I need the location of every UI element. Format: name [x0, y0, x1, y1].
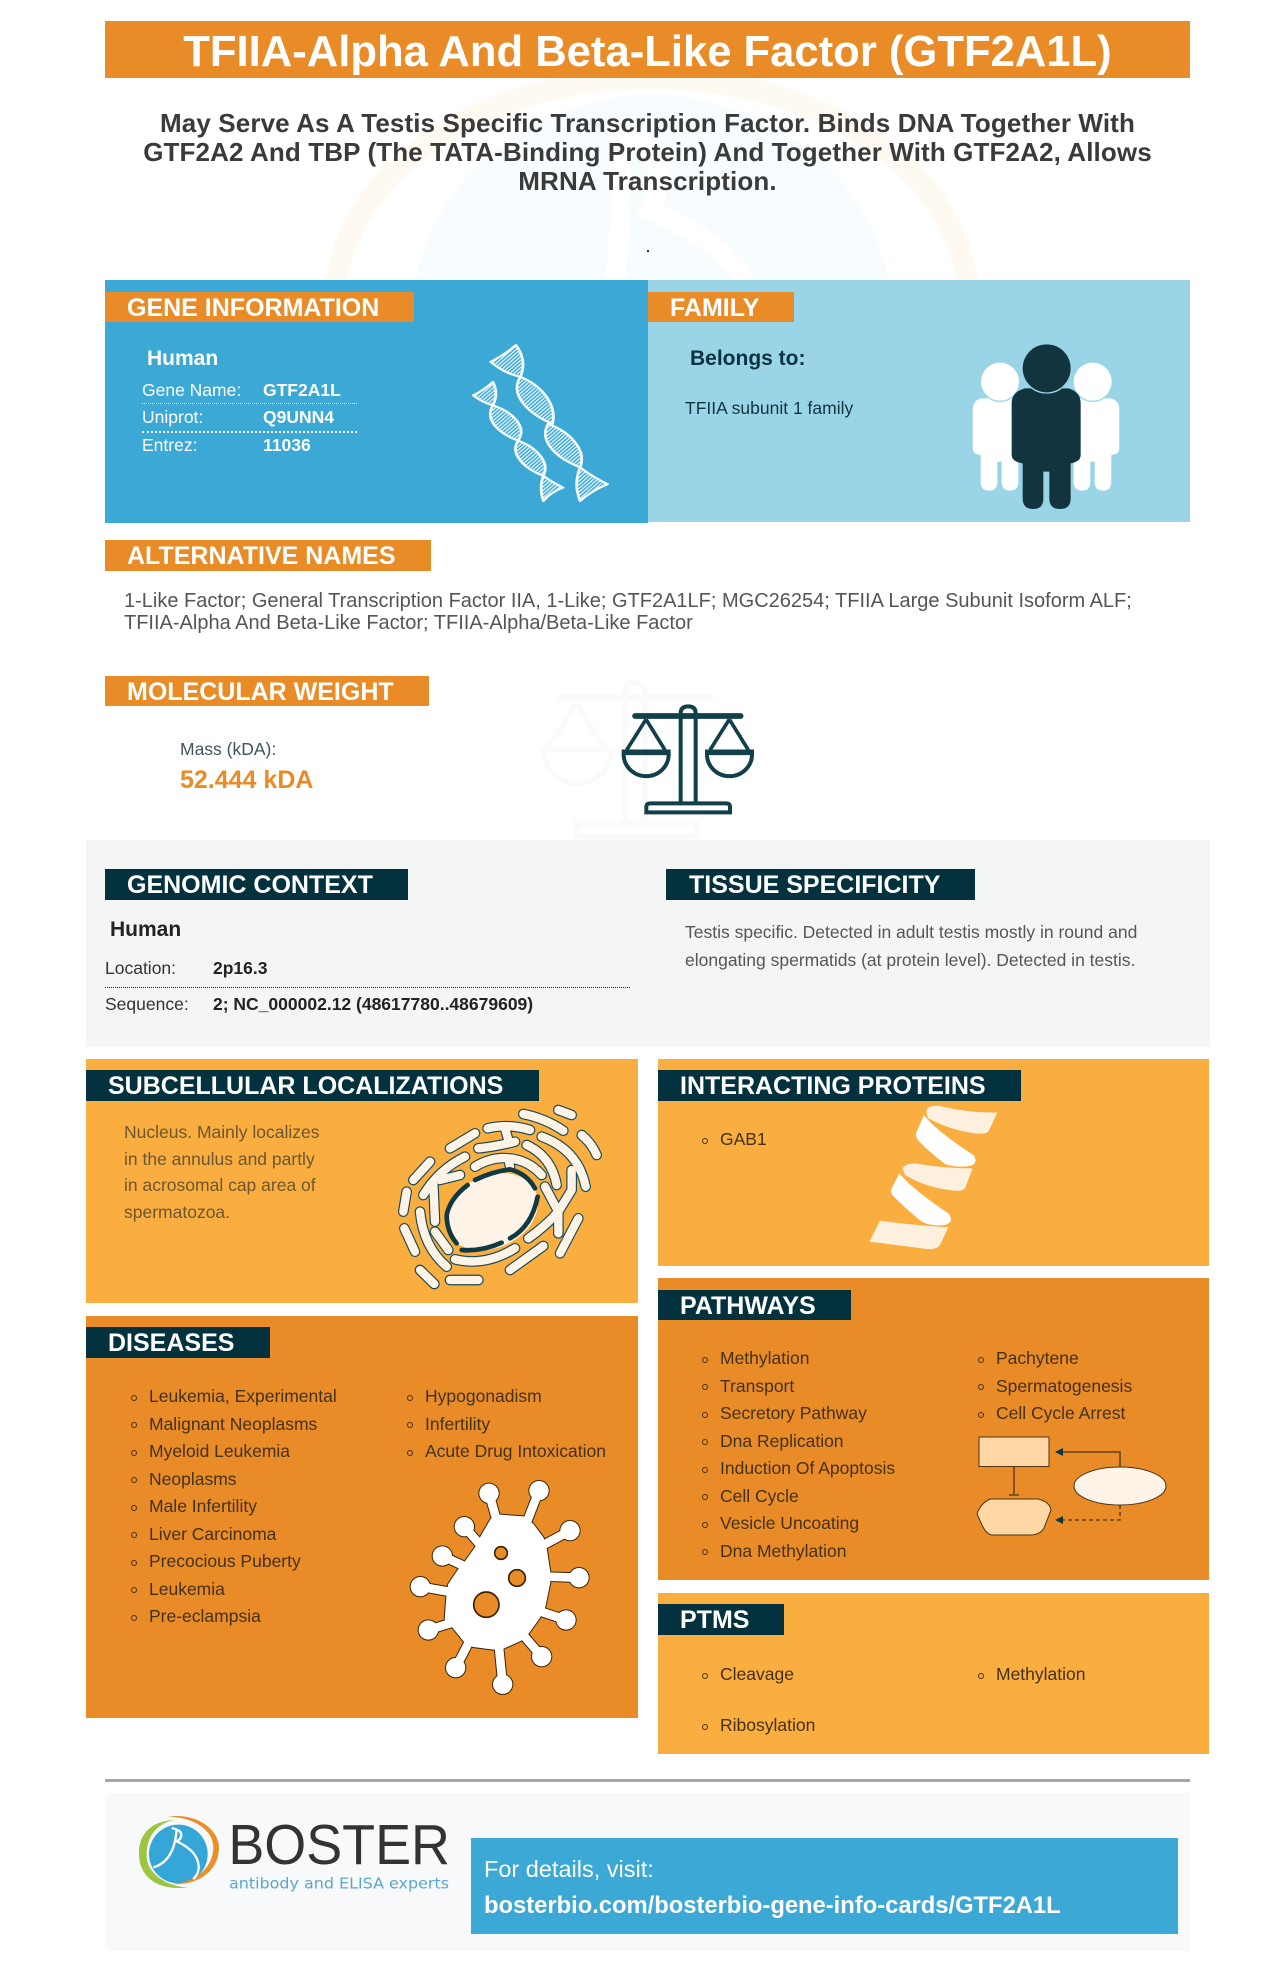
diseases list column 1: Male Infertility [149, 1496, 257, 1516]
callout: details link [471, 1838, 1178, 1934]
gene name row: Gene Name: [142, 380, 241, 400]
panel: diseases [86, 1316, 638, 1718]
gene name row: GTF2A1L [263, 380, 341, 400]
heading: gene information: GENE INFORMATION [127, 294, 379, 322]
summary description [143, 108, 1152, 196]
icon: virus [410, 1480, 590, 1695]
pathways list column 1: Secretory Pathway [720, 1403, 867, 1423]
heading: interacting proteins: INTERACTING PROTEINS [680, 1072, 986, 1100]
uniprot row: Uniprot: [142, 407, 203, 427]
pathways list column 2: Pachytene [996, 1348, 1079, 1368]
panel: gene information [105, 280, 648, 523]
summary description: MRNA Transcription. [518, 166, 777, 196]
alternative names text: 1-Like Factor; General Transcription Factor IIA, 1-Like; GTF2A1LF; MGC26254; TFIIA Large Subunit Isoform ALF; [124, 590, 1132, 612]
diseases list column 2 [407, 1386, 606, 1461]
diseases list column 1: Leukemia [149, 1578, 225, 1598]
sequence row: Sequence: [105, 994, 189, 1014]
species label: Human [147, 347, 218, 370]
diseases list column 1: Leukemia, Experimental [149, 1386, 337, 1406]
sequence row: 2; NC_000002.12 (48617780..48679609) [213, 994, 533, 1014]
alternative names text: TFIIA-Alpha And Beta-Like Factor; TFIIA-Alpha/Beta-Like Factor [124, 612, 693, 634]
family value: TFIIA subunit 1 family [685, 398, 853, 418]
heading: alternative names: ALTERNATIVE NAMES [127, 542, 396, 570]
title banner: TFIIA-Alpha And Beta-Like Factor (GTF2A1L) [183, 28, 1112, 76]
subcellular text: Nucleus. Mainly localizes [124, 1122, 320, 1142]
panel: footer [105, 1793, 1190, 1951]
diseases list column 1: Neoplasms [149, 1468, 237, 1488]
logo: Boster: BOSTER [228, 1813, 450, 1877]
watermark logo [326, 78, 978, 280]
PTMs list column 1: Ribosylation [720, 1715, 815, 1735]
heading: PTMs [658, 1604, 784, 1635]
heading: diseases [86, 1327, 270, 1358]
subcellular text: spermatozoa. [124, 1202, 230, 1222]
heading: tissue specificity: TISSUE SPECIFICITY [689, 871, 940, 899]
heading: diseases: DISEASES [108, 1329, 234, 1357]
pathways list column 2 [978, 1348, 1132, 1423]
diseases list column 2: Hypogonadism [425, 1386, 542, 1406]
location row [105, 957, 630, 988]
diseases list column 1: Malignant Neoplasms [149, 1414, 317, 1434]
PTMs list column 2: Methylation [996, 1664, 1086, 1684]
heading: family: FAMILY [670, 294, 759, 322]
entrez row [142, 435, 311, 455]
pathways list column 1: Induction Of Apoptosis [720, 1458, 895, 1478]
callout url: bosterbio.com/bosterbio-gene-info-cards/GTF2A1L [484, 1892, 1061, 1919]
diseases list column 1 [131, 1386, 337, 1626]
pathways list column 1: Vesicle Uncoating [720, 1513, 859, 1533]
heading: genomic context: GENOMIC CONTEXT [127, 871, 373, 899]
pathways list column 2: Spermatogenesis [996, 1376, 1132, 1396]
diseases list column 1: Pre-eclampsia [149, 1606, 261, 1626]
tissue specificity text: Testis specific. Detected in adult testis mostly in round and [685, 922, 1137, 942]
PTMs list column 1 [702, 1664, 815, 1735]
entrez row: 11036 [263, 435, 311, 455]
callout label: For details, visit: [484, 1856, 654, 1882]
heading: family [648, 292, 794, 322]
uniprot row [142, 406, 357, 433]
small dot [647, 250, 649, 252]
heading: molecular weight: MOLECULAR WEIGHT [127, 678, 394, 706]
PTMs list column 1: Cleavage [720, 1664, 794, 1684]
diseases list column 2: Acute Drug Intoxication [425, 1441, 606, 1461]
mass value: 52.444 kDA [180, 766, 313, 794]
icon: DNA double helix [472, 344, 609, 502]
icon: organelles around nucleus [398, 1104, 602, 1290]
interacting proteins list: GAB1 [720, 1129, 767, 1149]
entrez row: Entrez: [142, 435, 197, 455]
icon: pathway diagram [976, 1436, 1166, 1536]
icon: ghost scale [530, 675, 770, 840]
uniprot row: Q9UNN4 [263, 407, 334, 427]
tissue specificity text [685, 922, 1137, 970]
pathways list column 1: Dna Replication [720, 1430, 844, 1450]
icon: balance scale [622, 704, 754, 814]
subcellular text: in acrosomal cap area of [124, 1175, 316, 1195]
heading: pathways: PATHWAYS [680, 1292, 816, 1320]
location row: Location: [105, 958, 176, 978]
diseases list column 1: Precocious Puberty [149, 1551, 301, 1571]
subcellular text: in the annulus and partly [124, 1148, 315, 1168]
pathways list column 2: Cell Cycle Arrest [996, 1403, 1125, 1423]
diseases list column 2: Infertility [425, 1414, 490, 1434]
panel: PTMs [658, 1593, 1209, 1754]
icon: group of people [972, 344, 1120, 509]
panel: subcellular localizations [86, 1059, 638, 1303]
pathways list column 1: Methylation [720, 1348, 810, 1368]
pathways list column 1: Dna Methylation [720, 1540, 846, 1560]
heading: pathways [658, 1290, 851, 1320]
tissue specificity text: elongating spermatids (at protein level). Detected in testis. [685, 950, 1135, 970]
summary description: May Serve As A Testis Specific Transcription Factor. Binds DNA Together With [160, 108, 1135, 138]
panel: pathways [658, 1278, 1209, 1580]
belongs to label: Belongs to: [690, 347, 806, 370]
location row: 2p16.3 [213, 958, 267, 978]
pathways list column 1: Transport [720, 1376, 794, 1396]
panel: family [648, 280, 1190, 522]
mass label: Mass (kDA): [180, 739, 276, 759]
diseases list column 1: Myeloid Leukemia [149, 1441, 290, 1461]
species label: Human [110, 918, 181, 941]
panel: genomic context and tissue specificity [86, 840, 1210, 1047]
pathways list column 1 [702, 1348, 895, 1560]
logo: Boster: antibody and ELISA experts [229, 1876, 449, 1893]
panel: interacting proteins [658, 1059, 1209, 1266]
pathways list column 1: Cell Cycle [720, 1486, 799, 1506]
icon: protein ribbon [869, 1106, 998, 1250]
diseases list column 1: Liver Carcinoma [149, 1524, 276, 1544]
summary description: GTF2A2 And TBP (The TATA-Binding Protein) And Together With GTF2A2, Allows [143, 137, 1152, 167]
heading: PTMs: PTMS [680, 1606, 749, 1634]
logo: Boster [138, 1813, 450, 1893]
subcellular text [124, 1122, 320, 1222]
heading: subcellular localizations: SUBCELLULAR LOCALIZATIONS [108, 1072, 503, 1100]
alternative names text [124, 590, 1132, 634]
gene name row [142, 380, 357, 404]
